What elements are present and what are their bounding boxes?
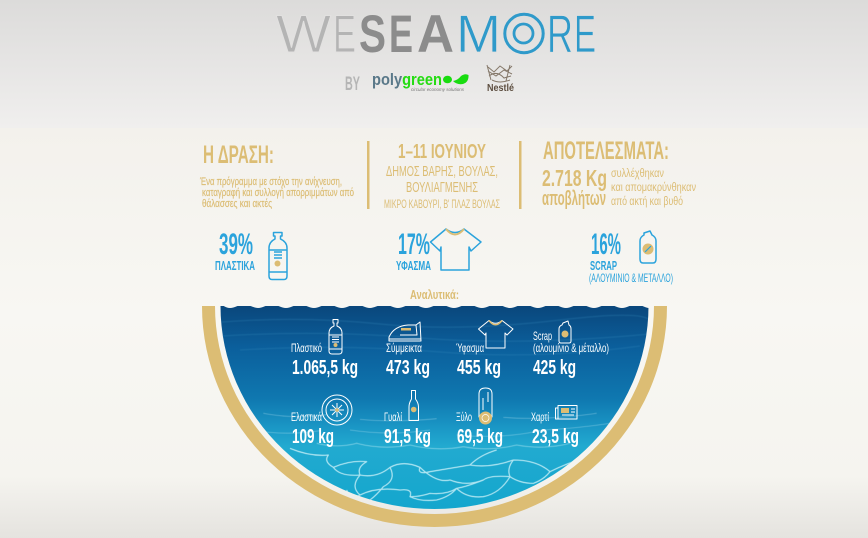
- logo: WeSeaMore: M: [456, 5, 501, 64]
- item: paper: [531, 406, 579, 448]
- icon: can: [559, 321, 571, 343]
- icon: log: [479, 388, 492, 424]
- stat: plastic 39%: 39%: [219, 228, 253, 261]
- item: scrap: 425 kg: [533, 357, 576, 379]
- item: glass: [384, 390, 431, 448]
- item: textile: [456, 320, 513, 379]
- logo: Nestlé: [487, 65, 514, 94]
- item: scrap: [533, 321, 609, 379]
- icon: t-shirt: [478, 320, 513, 348]
- logo: WeSeaMore: E: [389, 5, 413, 64]
- item: mixed: Σύμμεικτα: [386, 341, 422, 355]
- panel: results: ΑΠΟΤΕΛΕΣΜΑΤΑ:: [543, 137, 669, 165]
- item: scrap: (αλουμίνιο & μέταλλο): [533, 341, 609, 355]
- background: top band: [0, 0, 868, 128]
- stat: textile 17%: ΥΦΑΣΜΑ: [396, 258, 431, 273]
- stat: scrap 16%: SCRAP: [590, 258, 617, 273]
- panel: results: συλλέχθηκαν: [611, 166, 664, 180]
- stat: plastic 39%: ΠΛΑΣΤΙΚΑ: [215, 258, 255, 273]
- item: glass: 91,5 kg: [384, 426, 431, 448]
- item: plastic: 1.065,5 kg: [292, 357, 358, 379]
- heading: details: Αναλυτικά:: [410, 287, 459, 302]
- item: rubber: 109 kg: [292, 426, 334, 448]
- item: plastic: Πλαστικό: [291, 341, 322, 355]
- description text: θάλασσες και ακτές: [202, 198, 272, 210]
- icon: bottle: [329, 320, 342, 354]
- panel: results: 2.718 Kg: [542, 165, 607, 191]
- logo: polygreen: polygreen: [372, 71, 442, 89]
- description text: [199, 176, 354, 210]
- item: rubber: Ελαστικά: [291, 410, 322, 424]
- item: textile: 455 kg: [457, 357, 501, 379]
- bowl: sea water: [215, 300, 655, 515]
- logo: WeSeaMore: A: [417, 5, 454, 64]
- description text: καταγραφή και συλλογή απορριμμάτων από: [202, 187, 354, 199]
- item: mixed: 473 kg: [386, 357, 430, 379]
- by label: BY: [345, 74, 360, 95]
- item: scrap: Scrap: [533, 329, 552, 343]
- bowl: gold ring: [202, 306, 667, 527]
- icon: t-shirt: [430, 229, 481, 270]
- item: glass: Γυαλί: [384, 410, 402, 424]
- logo: WeSeaMore: S: [359, 5, 386, 64]
- logo: WeSeaMore: R: [547, 5, 573, 64]
- wave top edge: [218, 304, 652, 308]
- item: plastic: [291, 320, 358, 379]
- panel: dates and place: 1–11 ΙΟΥΝΙΟΥ: [398, 141, 486, 163]
- panel: results: από ακτή και βυθό: [611, 194, 683, 208]
- heading: action: Η ΔΡΑΣΗ:: [203, 141, 274, 169]
- stat: scrap 16%: [589, 228, 673, 285]
- item: wood: [456, 388, 503, 448]
- icon: iron: [389, 322, 421, 341]
- panel: action description: [199, 141, 354, 210]
- panel: results: αποβλήτων: [542, 188, 606, 210]
- logo: polygreen: [372, 71, 469, 92]
- panel: results: [542, 137, 696, 210]
- logo: WeSeaMore: E: [574, 5, 596, 64]
- panel: dates and place: ΔΗΜΟΣ ΒΑΡΗΣ, ΒΟΥΛΑΣ,: [386, 163, 498, 180]
- panel: dates and place: [384, 141, 500, 211]
- icon: newspaper: [556, 406, 577, 419]
- item: textile: Ύφασμα: [456, 341, 484, 355]
- stat: plastic 39%: [215, 228, 287, 280]
- panel: results: και απομακρύνθηκαν: [611, 180, 696, 194]
- item: rubber: [291, 395, 352, 448]
- stat: textile 17%: 17%: [398, 228, 430, 261]
- item: wood: Ξύλο: [456, 410, 472, 424]
- stat: scrap 16%: 16%: [591, 228, 621, 261]
- stat: textile 17%: [396, 228, 481, 273]
- icon: bottle: [269, 232, 287, 280]
- description text: Ένα πρόγραμμα με στόχο την ανίχνευση,: [199, 176, 342, 188]
- panel: dates and place: ΜΙΚΡΟ ΚΑΒΟΥΡΙ, Β' ΠΛΑΖ ΒΟΥΛΑΣ: [384, 199, 500, 211]
- icon: can: [640, 231, 656, 263]
- background: lower panel: [0, 128, 868, 538]
- logo: WeSeaMore: E: [333, 5, 356, 64]
- water caustics: [250, 413, 610, 500]
- item: paper: Χαρτί: [531, 410, 549, 424]
- item: paper: 23,5 kg: [532, 426, 579, 448]
- logo: WeSeaMore: [276, 5, 596, 64]
- logo: polygreen: circular economy solutions: [411, 87, 465, 92]
- logo: Nestlé: Nestlé: [487, 83, 514, 94]
- icon: tire: [322, 395, 352, 425]
- logo: WeSeaMore: W: [276, 5, 331, 64]
- panel: dates and place: ΒΟΥΛΙΑΓΜΕΝΗΣ: [406, 179, 478, 196]
- stat: scrap 16%: (ΑΛΟΥΜΙΝΙΟ & ΜΕΤΑΛΛΟ): [589, 271, 673, 285]
- icon: bottle: [409, 390, 418, 420]
- item: mixed: [386, 322, 430, 379]
- item: wood: 69,5 kg: [457, 426, 503, 448]
